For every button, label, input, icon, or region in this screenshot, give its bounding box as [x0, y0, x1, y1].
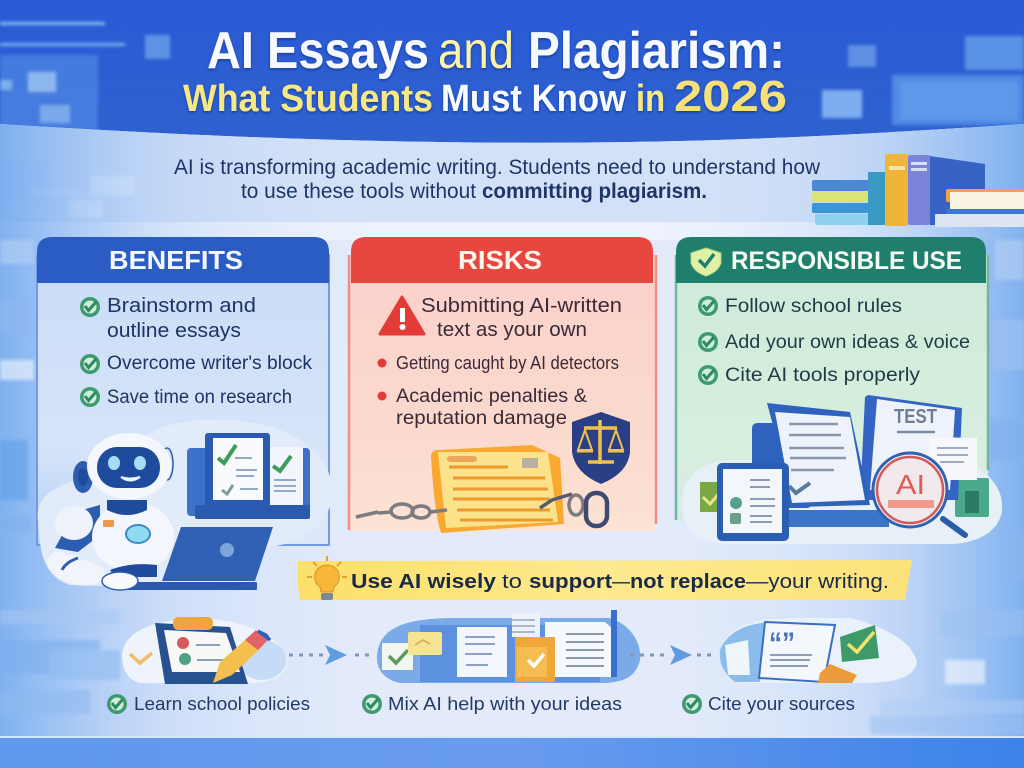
responsible panel body	[676, 255, 988, 522]
responsible header	[676, 237, 986, 283]
banner message: —	[612, 571, 630, 593]
panel: responsible use	[676, 237, 988, 522]
title: in	[636, 78, 665, 120]
step label: learn school policies: Learn school policies	[134, 694, 310, 714]
document on laptop	[752, 403, 889, 527]
chain	[356, 494, 583, 518]
step 1 illustration: clipboard and pencil	[122, 617, 287, 684]
risk item: penalties: reputation damage	[396, 408, 567, 429]
yellow banner	[297, 556, 912, 600]
robot head	[73, 433, 173, 499]
icon: shield with scales	[572, 412, 630, 484]
icon: documents on tablet	[187, 433, 310, 519]
padlock shackle	[586, 493, 607, 526]
banner message: support	[529, 571, 612, 593]
panel: benefits	[37, 237, 329, 545]
risk item: penalties	[378, 386, 587, 429]
risks heading: RISKS	[458, 245, 542, 275]
header band	[0, 0, 1024, 143]
icon: heart shield check	[691, 248, 721, 276]
responsible item: cite: Cite AI tools properly	[725, 365, 921, 386]
responsible heading: RESPONSIBLE USE	[731, 247, 962, 275]
step 3 illustration: citing sources: “”	[769, 627, 795, 660]
intro text: committing plagiarism.	[482, 180, 707, 203]
test paper	[860, 395, 962, 500]
arrow: step 2 to step 3	[630, 645, 714, 665]
illustration: chained essay and justice shield	[356, 412, 630, 533]
intro text: to use these tools without	[241, 180, 476, 203]
banner message: to	[502, 571, 522, 593]
icon: stack of books	[812, 154, 1024, 227]
step 2 illustration: mixing notes and documents	[377, 610, 640, 683]
icon: light bulb	[307, 556, 347, 600]
benefits header	[37, 237, 329, 283]
chained essay	[431, 445, 564, 533]
responsible item: rules: Follow school rules	[725, 296, 902, 317]
risk item: detectors: Getting caught by AI detectors	[396, 353, 619, 373]
green folder	[955, 478, 989, 517]
step label: mix AI help: Mix AI help with your ideas	[388, 694, 622, 714]
benefits heading: BENEFITS	[109, 245, 243, 275]
benefits panel body	[37, 255, 329, 545]
icon: magnifier with AI	[873, 453, 965, 535]
banner message	[351, 571, 889, 593]
step label: cite sources: Cite your sources	[708, 694, 855, 714]
risk item: submitting: Submitting AI-written	[421, 295, 622, 317]
step 3 illustration: citing sources	[720, 618, 917, 683]
banner message: not replace	[630, 571, 746, 593]
robot body	[55, 500, 174, 572]
footer band	[0, 736, 1024, 768]
robot arm and hand	[47, 552, 157, 590]
icon: magnifier with AI: AI	[896, 469, 925, 500]
second paper	[929, 437, 977, 480]
intro text: AI is transforming academic writing. Students need to understand how	[174, 156, 821, 179]
banner message: Use AI wisely	[351, 571, 497, 593]
icon: laptop	[127, 527, 273, 590]
arrow: step 1 to step 2	[289, 645, 370, 665]
benefit item: writer's block: Overcome writer's block	[107, 353, 312, 374]
risks panel body	[349, 255, 656, 531]
illustration: documents, test and AI magnifier	[682, 395, 1002, 544]
title: and	[438, 22, 514, 80]
illustration: robot with laptop and documents	[38, 420, 332, 590]
cloud backdrop	[38, 420, 332, 590]
benefit item: brainstorm: outline essays	[107, 320, 241, 342]
title: 2026	[674, 72, 787, 121]
panel: risks	[349, 237, 656, 531]
intro band background	[0, 124, 1024, 240]
cloud backdrop	[682, 460, 1002, 544]
risk item: submitting	[421, 295, 622, 341]
title: Plagiarism:	[528, 22, 785, 80]
icon: warning triangle	[380, 297, 424, 334]
title: Must Know	[441, 78, 626, 120]
benefit item: brainstorm: Brainstorm and	[107, 295, 256, 317]
risk item: penalties: Academic penalties &	[396, 386, 587, 407]
risks header	[351, 237, 653, 283]
small tablet	[717, 463, 789, 541]
responsible item: ideas and voice: Add your own ideas & voice	[725, 332, 970, 353]
title: AI Essays	[207, 22, 429, 80]
title	[183, 22, 787, 121]
risk item: submitting: text as your own	[437, 319, 587, 341]
banner message: —your writing.	[746, 571, 889, 593]
small green box	[700, 482, 722, 512]
benefit item: brainstorm	[80, 295, 256, 342]
benefit item: research: Save time on research	[107, 387, 292, 408]
intro text	[174, 156, 821, 203]
test paper: TEST	[894, 406, 937, 428]
title: What Students	[183, 78, 433, 120]
